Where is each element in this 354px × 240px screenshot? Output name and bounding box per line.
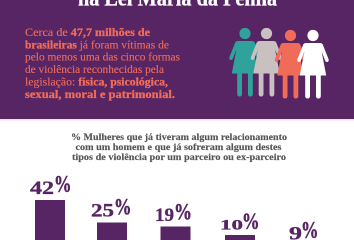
- bar: 19%: %: [174, 200, 192, 224]
- chart heading: [71, 133, 287, 163]
- bar: 25%: %: [114, 194, 132, 220]
- bar: 25%: 25: [91, 200, 114, 222]
- bar: 10%: [220, 209, 260, 240]
- bar: 19%: 19: [155, 205, 174, 226]
- text block: intro statistic: sexual, moral e patrimonial.: [25, 87, 175, 101]
- text block: intro statistic: de violência reconhecidas pela: [25, 62, 165, 76]
- text block: intro statistic: Cerca de 47,7 milhões de: [25, 25, 150, 39]
- text block: intro statistic: legislação: física, psicológica,: [25, 74, 168, 88]
- bar: 9%: [289, 218, 318, 240]
- bar chart: [30, 172, 318, 240]
- panel: white chart area: [0, 119, 354, 240]
- bar: 10%: %: [242, 209, 260, 234]
- bar: 10%: 10: [220, 218, 243, 234]
- bar: 42%: %: [54, 172, 72, 198]
- chart heading: tipos de violência por um parceiro ou ex-parceiro: [72, 153, 286, 163]
- text block: intro statistic: pelo menos uma das cinco formas: [25, 50, 180, 64]
- chart heading: com um homem e que já sofreram algum destes: [76, 143, 282, 153]
- bar: 25%: [91, 194, 132, 240]
- bar: 19%: [155, 200, 192, 240]
- bar: 42%: 42: [30, 178, 54, 199]
- bar: 42%: [30, 172, 72, 240]
- chart heading: % Mulheres que já tiveram algum relacionamento: [71, 133, 287, 143]
- panel: purple header: [0, 0, 354, 119]
- text block: intro statistic: [25, 25, 180, 101]
- icon: four women: [229, 28, 329, 98]
- text block: intro statistic: brasileiras já foram vítimas de: [25, 38, 169, 52]
